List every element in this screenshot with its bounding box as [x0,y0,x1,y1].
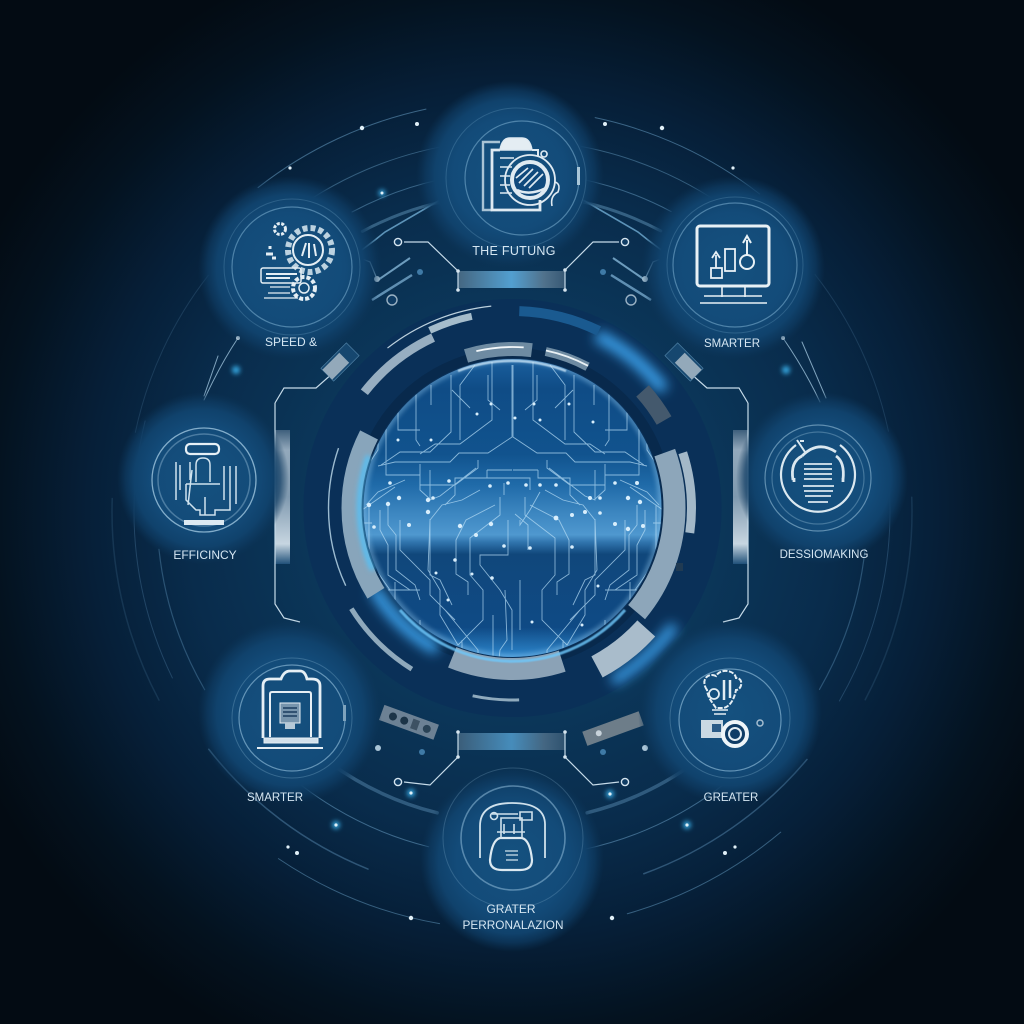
lens rim glow [364,359,662,657]
label: efficiency: EFFICINCY [173,548,237,562]
bottom-right capsule [582,711,644,746]
icon: clipboard and lens [483,138,559,210]
label: the future: THE FUTUNG [472,244,556,258]
top-right capsule [665,343,703,381]
node: smarter (top right) [641,176,825,360]
label: greater: GRATER [486,902,536,916]
icon: gears and panel [261,224,332,299]
bottom bar [458,733,565,750]
label: personalization: PERRONALAZION [463,918,563,932]
node: efficiency (left) [117,392,289,564]
glowing dots [232,122,790,920]
circuit traces right [512,362,662,653]
node: smarter (bottom left) [198,620,382,804]
circuit nodes [367,402,645,626]
circuit traces left [364,362,540,656]
node: greater personalization (bottom) [420,768,604,952]
label: decision making: DESSIOMAKING [780,549,868,561]
center ring dark backing [334,330,690,686]
central core [328,306,696,702]
left bar [275,430,290,564]
icon: device frame [257,671,323,748]
ring segments [310,305,716,711]
top bar [458,271,565,288]
top-left capsule [321,343,359,381]
icon: monitor chart [697,226,769,303]
bracket traces [275,200,748,785]
node: the future (top) [416,81,604,269]
icon: device shield [480,803,545,870]
icon: temple circuit [176,444,236,525]
node: speed (top left) [198,176,382,360]
node: decision making (right) [736,392,908,564]
label: speed: SPEED & [265,335,317,349]
node: greater (bottom right) [638,620,822,804]
circuit lens [364,359,662,657]
decorative orbit arcs [94,94,930,930]
label: greater: GREATER [704,792,758,804]
icon: document ring [781,440,855,512]
label: smarter: SMARTER [704,338,760,350]
lens highlight [400,610,625,661]
bottom-left capsule [379,705,439,740]
connector brackets and bars [275,200,748,786]
right bar [733,430,748,564]
icon: head tree and lens [701,671,763,746]
label: smarter: SMARTER [247,792,303,804]
